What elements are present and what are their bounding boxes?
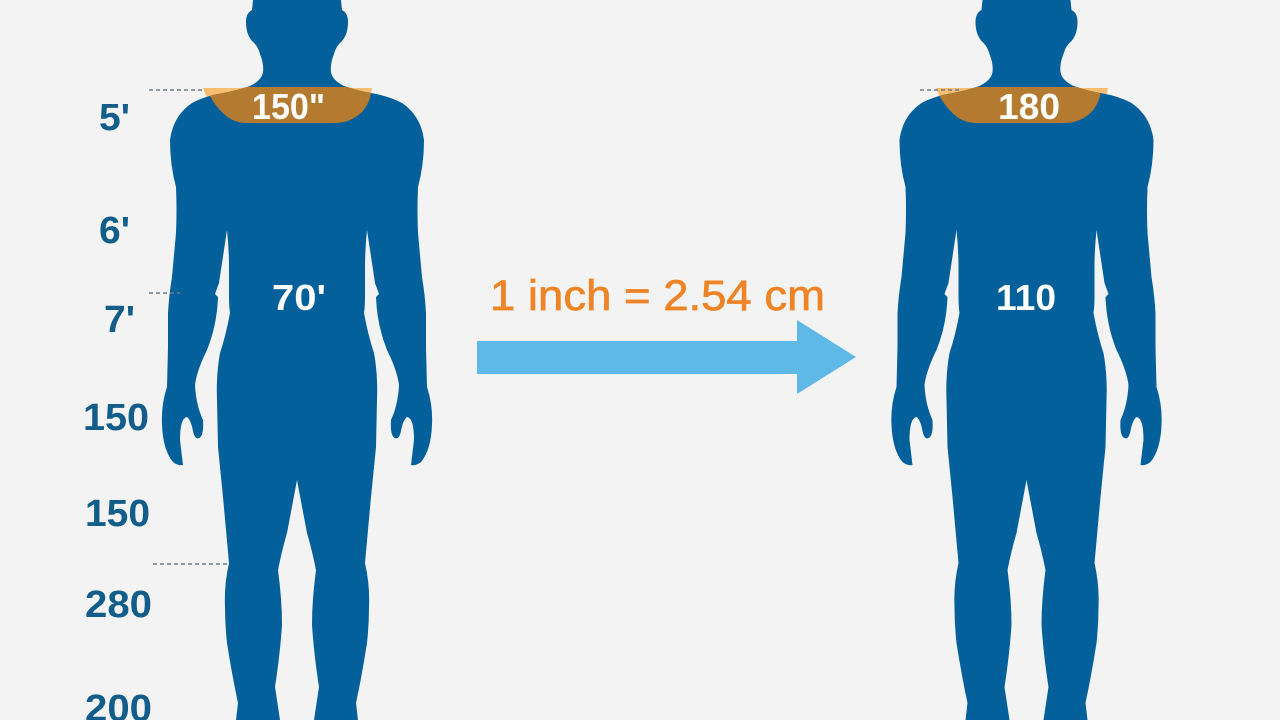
label: 150: 150 xyxy=(83,397,149,439)
body silhouette xyxy=(891,0,1162,720)
left figure: body silhouette with neck band xyxy=(162,0,432,720)
label: 7 feet: 7' xyxy=(104,299,135,341)
neck band: brown overlay xyxy=(930,87,1102,123)
neck band: light orange edges xyxy=(203,88,372,98)
height scale labels xyxy=(83,97,152,720)
label: 6 feet: 6' xyxy=(99,210,130,252)
label: 5 feet: 5' xyxy=(99,97,130,139)
right figure: body silhouette with neck band xyxy=(891,0,1162,720)
dashed guide: left waist xyxy=(149,292,180,294)
label: 150: 150 xyxy=(85,493,150,535)
value: 110: 110 xyxy=(996,277,1056,318)
arrow xyxy=(477,320,856,394)
dashed guide: left knee xyxy=(153,563,229,565)
value: 70 inches: 70' xyxy=(272,277,326,318)
dashed guide: left shoulder xyxy=(149,89,203,91)
body silhouette xyxy=(162,0,432,720)
dashed guide: right shoulder xyxy=(920,89,962,91)
neck band: light orange edges xyxy=(936,88,1108,98)
label: 280: 280 xyxy=(85,584,152,626)
value: 180: 180 xyxy=(998,86,1060,127)
conversion heading: 1 inch = 2.54 cm xyxy=(490,272,825,320)
neck band: brown overlay xyxy=(200,87,372,123)
value: 150 inches: 150" xyxy=(252,86,325,127)
